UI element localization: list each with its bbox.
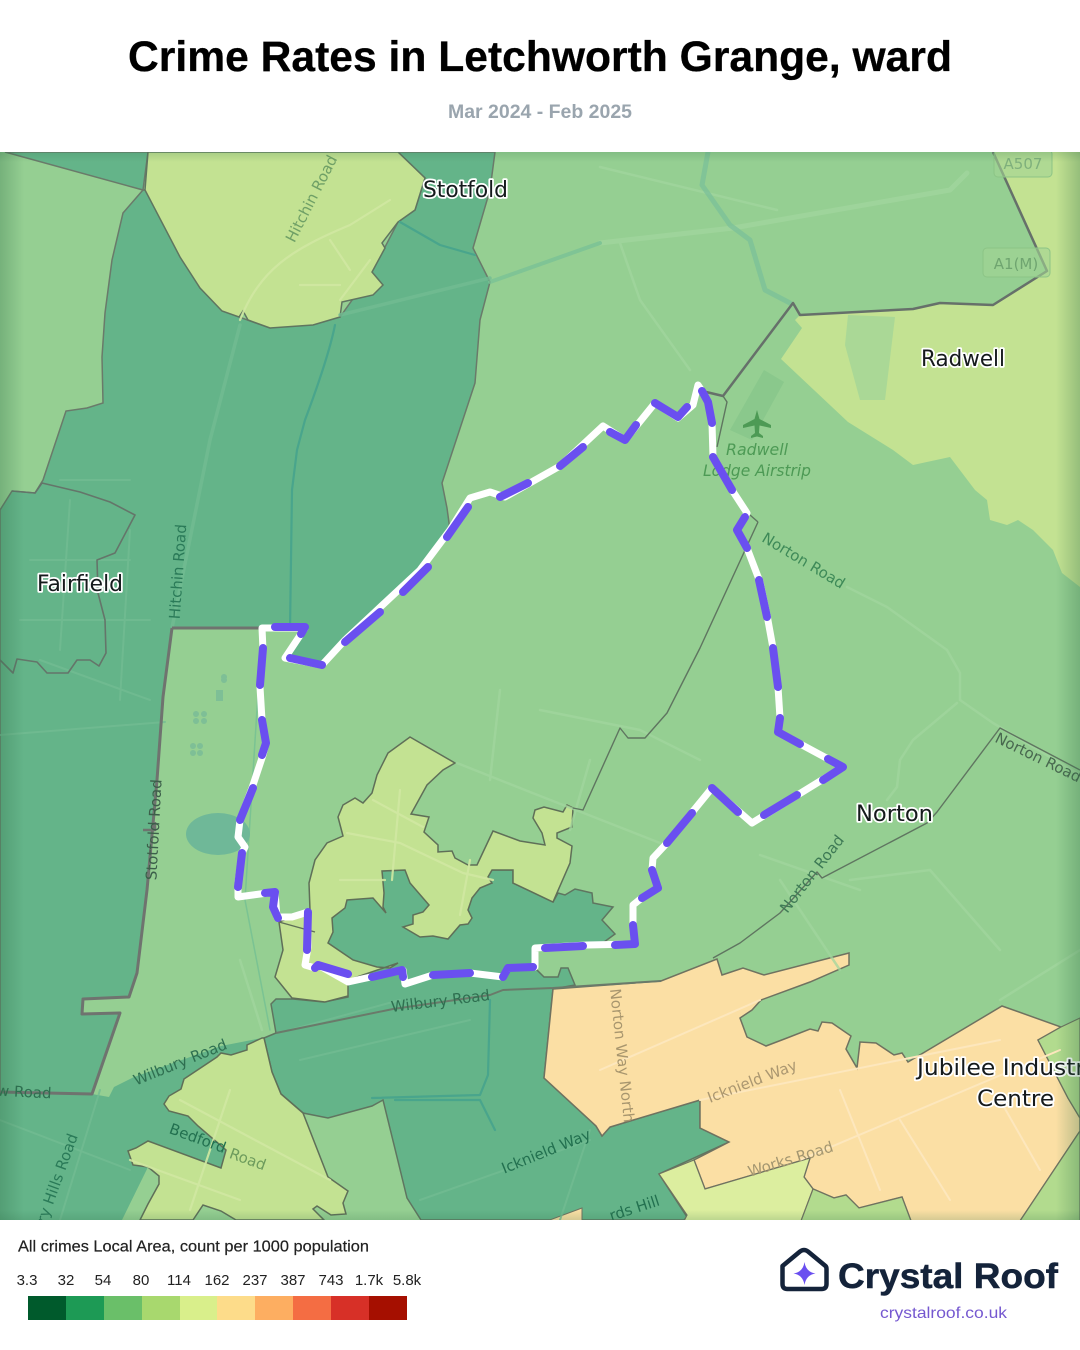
road labels: Norton Way North xyxy=(606,988,638,1123)
road labels: Icknield Way xyxy=(499,1125,593,1177)
region: yellow Stotfold south xyxy=(145,152,425,328)
road labels: Norton Road xyxy=(776,832,848,916)
airstrip patch xyxy=(730,370,784,440)
road labels: Bedford xyxy=(167,1120,228,1157)
legend tick values: 3.3 xyxy=(17,1272,37,1289)
icon: airstrip plane xyxy=(743,410,771,438)
icon: purple star xyxy=(794,1262,816,1285)
website: crystalroof.co.uk xyxy=(880,1305,1008,1322)
legend tick values xyxy=(17,1272,422,1289)
region: yellow Grange estate xyxy=(275,737,573,1002)
place labels: Radwell xyxy=(921,347,1005,372)
place labels: Stotfold xyxy=(423,178,508,203)
road labels: rds Hill xyxy=(607,1192,662,1225)
legend colour scale xyxy=(28,1296,407,1320)
label: Radwell Lodge Airstrip: Radwell xyxy=(726,440,789,459)
subtitle: date range: Mar 2024 - Feb 2025 xyxy=(448,102,632,123)
legend tick values: 1.7k xyxy=(355,1272,384,1289)
legend tick values: 387 xyxy=(280,1272,306,1289)
ward boundary: Letchworth Grange xyxy=(238,385,843,984)
legend tick values: 5.8k xyxy=(393,1272,422,1289)
label: Radwell Lodge Airstrip: Lodge Airstrip xyxy=(703,461,811,480)
legend xyxy=(17,1238,422,1320)
legend tick values: 162 xyxy=(204,1272,230,1289)
legend tick values: 32 xyxy=(58,1272,74,1289)
pond xyxy=(186,813,250,855)
choropleth map panel xyxy=(0,150,1080,1225)
place labels xyxy=(37,178,1080,1112)
road shields xyxy=(983,150,1052,277)
region: yellow Radwell xyxy=(781,152,1080,587)
road labels: ry Hills Road xyxy=(33,1131,82,1225)
legend tick values: 54 xyxy=(95,1272,111,1289)
road labels: Norton Road xyxy=(759,529,848,593)
logo: Crystal Roof xyxy=(782,1250,1058,1322)
title: Crime Rates in Letchworth Grange, ward xyxy=(128,33,952,81)
region: orange Jubilee Industrial xyxy=(544,953,1080,1221)
legend tick values: 237 xyxy=(242,1272,268,1289)
road labels: Wilbury Road xyxy=(131,1035,230,1089)
road shields: A507 xyxy=(1004,155,1042,173)
road labels xyxy=(0,152,1080,1225)
road labels: Works Road xyxy=(746,1138,835,1181)
road labels: Wilbury Road xyxy=(390,986,491,1016)
road labels: Hitchin Road xyxy=(166,524,190,620)
farm buildings xyxy=(190,674,227,756)
region: yellow Bedford Road xyxy=(128,1038,348,1220)
road labels: Icknield Way xyxy=(705,1056,800,1107)
road labels: Hitchin Road xyxy=(282,152,341,245)
map edge vignette xyxy=(0,152,1080,1220)
road labels: Stotfold Road xyxy=(142,779,166,881)
place labels: Centre xyxy=(977,1087,1054,1112)
legend title: All crimes Local Area, count per 1000 population xyxy=(18,1238,369,1256)
place labels: Norton xyxy=(856,802,933,827)
legend tick values: 743 xyxy=(318,1272,344,1289)
legend tick values: 80 xyxy=(133,1272,149,1289)
region: dark green western area xyxy=(0,152,495,1094)
boundary lines xyxy=(0,152,1080,1094)
region: pale yellow Works Road xyxy=(659,1158,813,1221)
streets and waterways xyxy=(0,152,1080,1220)
region: dark green southern area xyxy=(264,870,729,1220)
place labels: Fairfield xyxy=(37,572,123,597)
icon: house outline xyxy=(782,1250,826,1289)
road labels: Road xyxy=(227,1144,268,1174)
region: dark green south-western area xyxy=(0,1038,262,1220)
place labels: Jubilee Industr xyxy=(915,1056,1080,1081)
legend tick values: 114 xyxy=(167,1272,191,1289)
label: Radwell Lodge Airstrip xyxy=(703,440,811,480)
road shields: A1(M) xyxy=(994,255,1038,273)
region: mid green small areas xyxy=(801,1018,1080,1221)
logo wordmark: Crystal Roof xyxy=(838,1257,1058,1296)
